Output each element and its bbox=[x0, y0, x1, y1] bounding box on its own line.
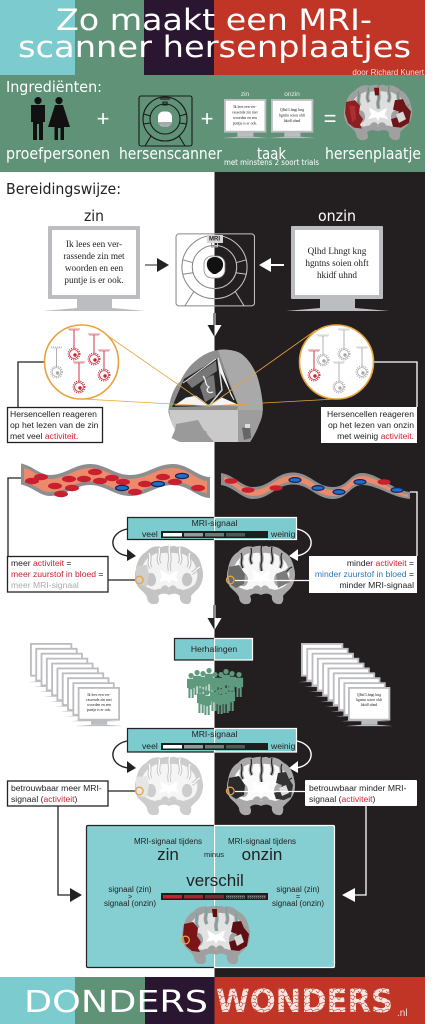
header background bbox=[0, 0, 425, 75]
task monitors: hkidf uhnd bbox=[284, 119, 300, 123]
curved arrow: right reliable signal bbox=[289, 741, 311, 773]
title: Zo maakt een MRI- bbox=[56, 3, 372, 37]
stack of sentence monitors: puntje is er ook. bbox=[87, 708, 111, 712]
brain: strong signal bbox=[135, 546, 203, 604]
task monitors: hgntns soien ohft bbox=[279, 114, 306, 118]
sentence term: MRI-signaal tijdens bbox=[134, 837, 202, 846]
MRI signal scale repeated: MRI-signaal bbox=[192, 729, 238, 739]
label: onzin: onzin bbox=[318, 207, 356, 225]
text box: much activity bbox=[8, 408, 102, 442]
sentence term: zin bbox=[157, 845, 179, 864]
monitor: nonsense bbox=[286, 226, 389, 311]
sentence term bbox=[134, 837, 202, 864]
blood vessel: oxygen rich bbox=[21, 464, 210, 498]
stack of sentence monitors bbox=[28, 643, 123, 726]
task monitors: Ik lees een ver- bbox=[233, 105, 257, 109]
right comparison: signaal (onzin) bbox=[272, 899, 324, 908]
right comparison: = bbox=[296, 894, 300, 901]
neuron circle: few active bbox=[300, 325, 374, 399]
stack of sentence monitors: Ik lees een ver- bbox=[87, 693, 111, 697]
text box: much activity: met veel activiteit. bbox=[10, 431, 78, 441]
text box: reliably more bbox=[8, 781, 108, 806]
monitor: nonsense: hkidf uhnd bbox=[317, 270, 357, 280]
arrow: down to repetitions bbox=[208, 605, 222, 630]
stack of nonsense monitors bbox=[299, 643, 393, 726]
connector: left circle to box bbox=[18, 362, 44, 407]
text box: less signal: minder zuurstof in bloed = bbox=[315, 569, 414, 579]
MRI signal scale: veel bbox=[142, 529, 158, 539]
panel: right dark background bbox=[214, 172, 425, 977]
zoom lines bbox=[82, 330, 336, 406]
equals sign: = bbox=[324, 106, 336, 131]
stack of nonsense monitors: hgntns soien ohft bbox=[356, 698, 383, 702]
monitor: sentence: woorden en een bbox=[65, 263, 123, 273]
curved arrow: right signal bbox=[289, 529, 311, 561]
icon: central scanner: MRI bbox=[209, 236, 220, 242]
arrow: sentence to scanner bbox=[145, 258, 169, 272]
text box: more signal: meer MRI-signaal bbox=[11, 580, 79, 590]
connector: left box to brain bbox=[108, 579, 136, 581]
connector: right reliable brain to box bbox=[235, 790, 305, 792]
neuron circle: many active bbox=[44, 325, 118, 399]
right comparison: signaal (zin) bbox=[276, 885, 320, 894]
text box: little activity: Hersencellen reageren bbox=[327, 409, 414, 419]
text box: more signal: meer zuurstof in bloed = bbox=[11, 569, 103, 579]
panel: ingredients bbox=[0, 75, 425, 172]
nonsense term bbox=[228, 837, 296, 864]
text box: more signal bbox=[8, 556, 108, 592]
task monitors bbox=[222, 91, 316, 138]
icon: scanner bbox=[139, 96, 192, 146]
ingredient labels bbox=[6, 144, 421, 167]
stack of sentence monitors: woorden en een bbox=[87, 703, 111, 707]
text box: reliably less bbox=[305, 780, 417, 806]
arrow: scanner down bbox=[208, 313, 222, 337]
blood vessel: oxygen poor bbox=[221, 472, 410, 499]
label: zin: zin bbox=[84, 207, 104, 225]
connector: right circle to box bbox=[374, 362, 417, 407]
monitor: sentence: puntje is er ook. bbox=[64, 275, 124, 285]
plus sign: + bbox=[201, 106, 213, 131]
heading: ingredients: Ingrediënten: bbox=[6, 78, 102, 96]
MRI signal scale: MRI-signaal bbox=[192, 518, 238, 528]
nonsense term: onzin bbox=[242, 845, 282, 864]
connector: right brain to box bbox=[235, 580, 309, 582]
brain: weak signal bbox=[226, 546, 295, 604]
difference colour bar bbox=[161, 893, 268, 900]
connector: left reliable box to brain bbox=[108, 790, 136, 792]
icon: brain image bbox=[344, 85, 412, 140]
text box: more signal: meer activiteit = bbox=[11, 558, 71, 568]
arrow: right into difference panel bbox=[342, 806, 366, 902]
left comparison: > bbox=[128, 894, 132, 901]
text box: much activity: Hersencellen reageren bbox=[10, 409, 97, 419]
monitor: sentence bbox=[43, 226, 146, 311]
text box: reliably more: betrouwbaar meer MRI- bbox=[11, 783, 102, 793]
task monitors: woorden en een bbox=[233, 116, 257, 120]
icon: test subjects bbox=[31, 97, 70, 140]
head scan bbox=[168, 350, 263, 442]
text box: little activity bbox=[321, 407, 417, 443]
arrow: nonsense to scanner bbox=[259, 258, 284, 272]
crowd of participants bbox=[187, 668, 243, 715]
ingredient labels: taak bbox=[257, 144, 287, 163]
repetitions label bbox=[174, 638, 252, 660]
panel: difference bbox=[86, 826, 334, 968]
curved arrow: left signal bbox=[113, 529, 136, 561]
ingredient labels: hersenscanner bbox=[119, 144, 222, 163]
plus sign: + bbox=[97, 106, 109, 131]
text box: little activity: op het lezen van onzin bbox=[328, 420, 414, 430]
task monitors: zin bbox=[241, 91, 250, 98]
monitor: nonsense: Qlhd Lhngt kng bbox=[308, 246, 367, 256]
nonsense term: MRI-signaal tijdens bbox=[228, 837, 296, 846]
monitor: nonsense: hgntns soien ohft bbox=[305, 258, 369, 268]
monitor: sentence: Ik lees een ver- bbox=[66, 239, 122, 249]
text box: less signal: minder activiteit = bbox=[347, 558, 414, 568]
author credit: door Richard Kunert bbox=[352, 68, 425, 77]
repetitions label: Herhalingen bbox=[191, 644, 237, 654]
stack of nonsense monitors: Qlhd Lhngt kng bbox=[357, 693, 381, 697]
brain: reliable weak signal bbox=[226, 757, 295, 815]
ingredient labels: proefpersonen bbox=[6, 144, 110, 163]
text box: little activity: met weinig activiteit. bbox=[337, 431, 414, 441]
task monitors: onzin bbox=[284, 91, 300, 98]
footer background bbox=[0, 977, 425, 1024]
MRI signal scale bbox=[128, 518, 296, 540]
task monitors: puntje is er ook. bbox=[233, 122, 257, 126]
heading: preparation: Bereidingswijze: bbox=[6, 180, 121, 198]
icon: central scanner bbox=[176, 234, 254, 306]
left comparison: signaal (onzin) bbox=[104, 899, 156, 908]
text box: less signal: minder MRI-signaal bbox=[339, 580, 414, 590]
brain: difference map bbox=[182, 906, 250, 964]
MRI signal scale repeated: veel bbox=[142, 741, 158, 751]
text box: less signal bbox=[309, 556, 417, 593]
left comparison bbox=[104, 885, 156, 908]
difference heading: verschil bbox=[186, 871, 244, 890]
connector: right vessel to box bbox=[410, 492, 417, 556]
title: scanner hersenplaatjes bbox=[18, 30, 411, 64]
text box: much activity: op het lezen van de zin bbox=[10, 420, 99, 430]
brain: reliable strong signal bbox=[135, 757, 203, 815]
stack of nonsense monitors: hkidf uhnd bbox=[361, 703, 377, 707]
ingredient labels: met minstens 2 soort trials bbox=[224, 158, 319, 167]
MRI signal scale: weinig bbox=[270, 529, 296, 539]
text box: reliably less: signaal (activiteit) bbox=[309, 794, 376, 804]
right comparison bbox=[272, 885, 324, 908]
ingredient labels: hersenplaatje bbox=[325, 144, 421, 163]
stack of sentence monitors: rassende zin met bbox=[86, 698, 113, 702]
task monitors: rassende zin met bbox=[232, 110, 259, 114]
MRI signal scale repeated bbox=[128, 728, 296, 752]
text box: reliably more: signaal (activiteit) bbox=[11, 794, 78, 804]
curved arrow: left reliable signal bbox=[113, 741, 136, 773]
MRI signal scale repeated: weinig bbox=[270, 741, 296, 751]
arrow: left into difference panel bbox=[58, 806, 82, 902]
minus label: minus bbox=[204, 850, 224, 859]
footer logo: WONDERS bbox=[216, 982, 393, 1020]
footer logo: .nl bbox=[397, 1008, 408, 1019]
text box: reliably less: betrouwbaar minder MRI- bbox=[309, 783, 407, 793]
footer logo: DONDERS bbox=[24, 985, 208, 1020]
title bbox=[18, 3, 411, 64]
left comparison: signaal (zin) bbox=[108, 885, 152, 894]
monitor: sentence: rassende zin met bbox=[63, 251, 125, 261]
connector: left vessel to box bbox=[8, 478, 21, 556]
footer logo bbox=[24, 982, 408, 1020]
task monitors: Qlhd Lhngt kng bbox=[280, 108, 304, 112]
